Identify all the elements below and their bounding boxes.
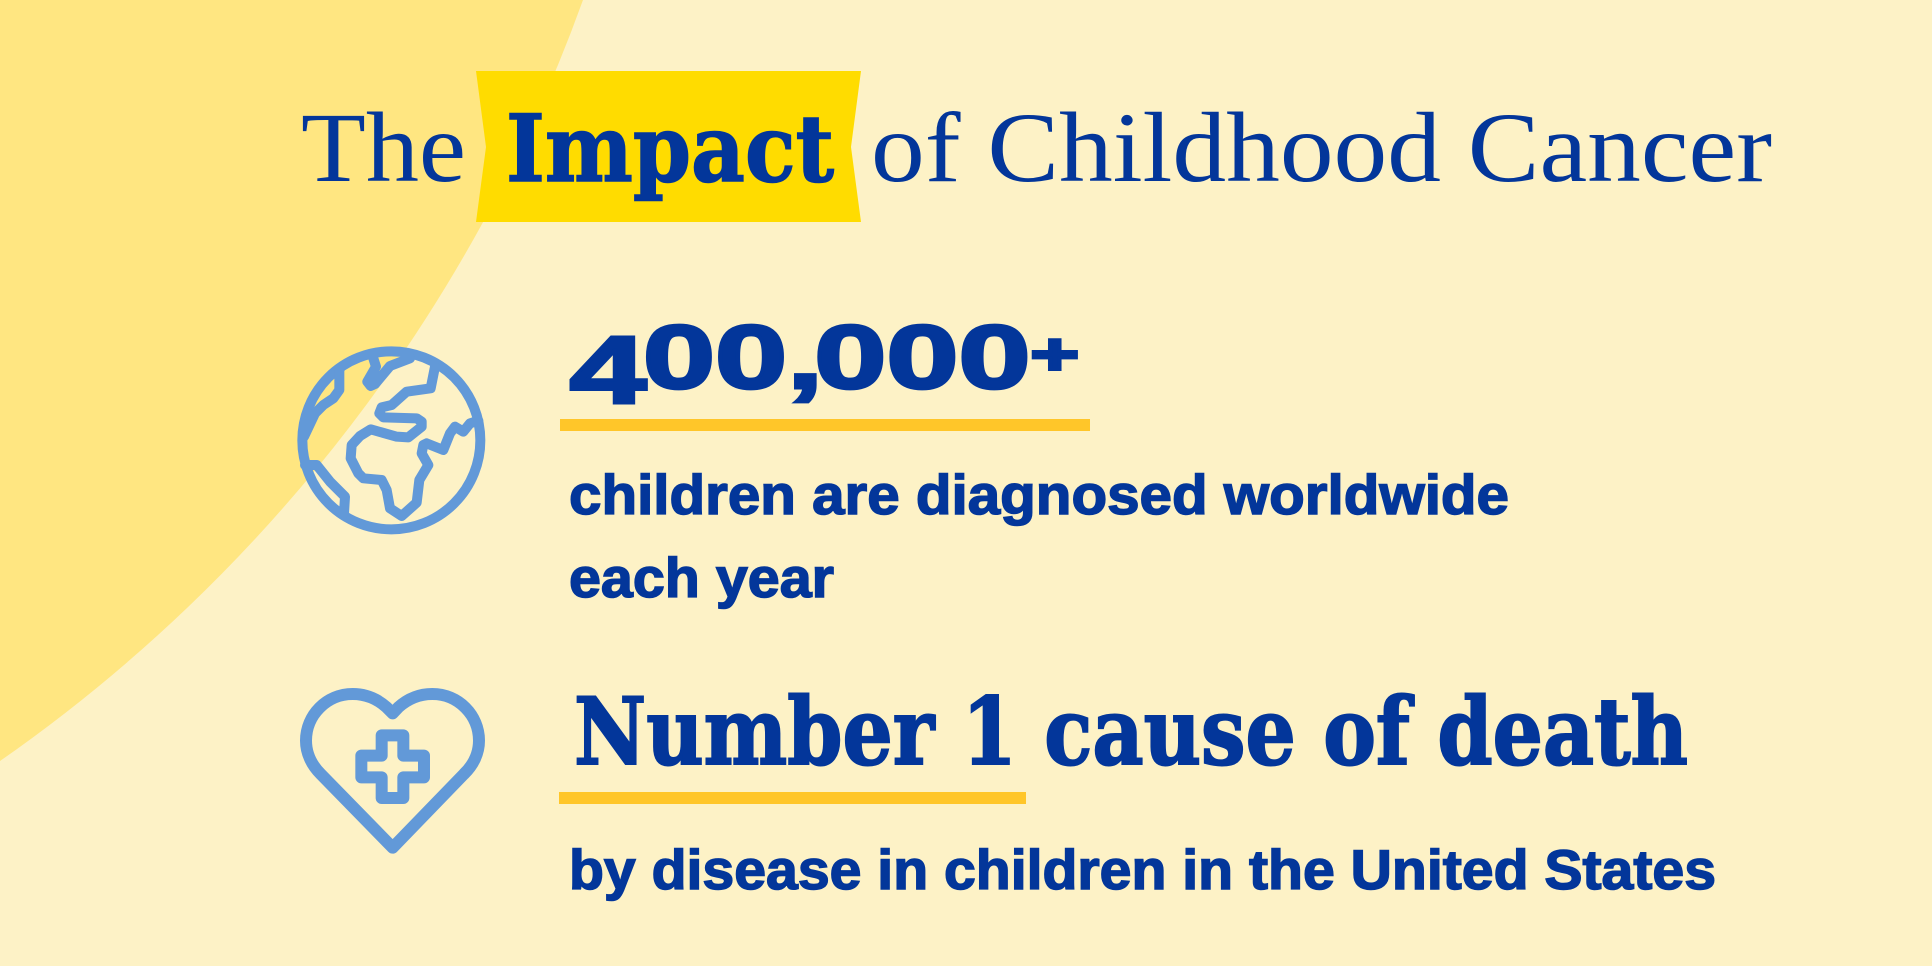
stat: number 1 cause of death — [559, 677, 1716, 901]
headline: Number 1 cause of death — [574, 677, 1688, 786]
description — [569, 463, 1509, 609]
title — [301, 71, 1772, 222]
title words: of Childhood Cancer: of Childhood Cancer — [871, 92, 1772, 203]
title word: Impact: Impact — [506, 94, 834, 203]
description: each year — [569, 546, 834, 609]
description: by disease in children in the United States — [569, 838, 1716, 901]
title word: The: The — [301, 92, 466, 203]
underline — [559, 792, 1026, 804]
icon: heart with cross — [306, 694, 479, 848]
description: children are diagnosed worldwide — [569, 463, 1509, 526]
underline — [560, 419, 1090, 431]
background circle — [0, 0, 583, 761]
icon: globe — [302, 351, 480, 529]
number 400,000+: 4 — [570, 317, 646, 424]
stat: 400,000+ — [560, 307, 1509, 609]
number 400,000+: 000 — [814, 307, 1031, 407]
title highlight banner — [476, 71, 861, 222]
number 400,000+: + — [1030, 322, 1079, 387]
number 400,000+: 00, — [643, 307, 823, 407]
